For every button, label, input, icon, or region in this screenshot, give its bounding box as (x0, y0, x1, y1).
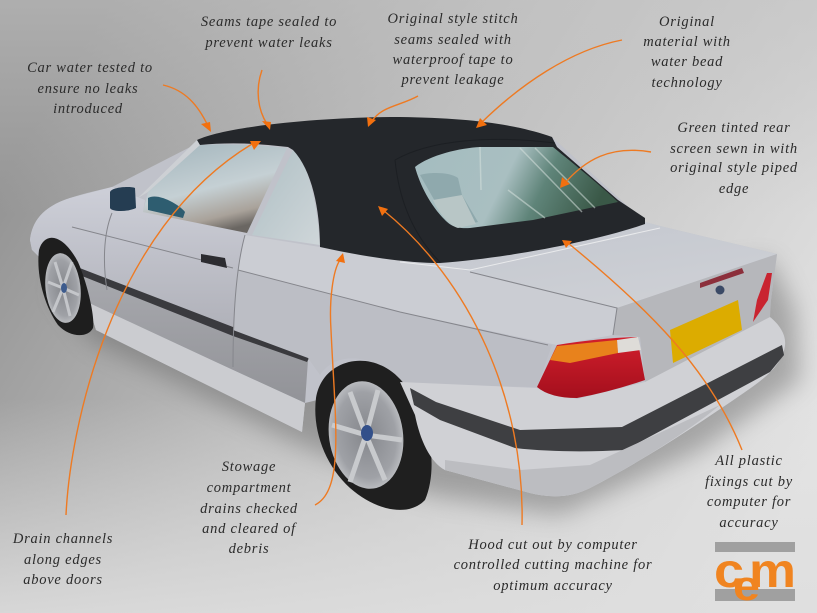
side skirt (87, 302, 305, 432)
label: drain channels: along edges (24, 552, 102, 568)
rear screen (415, 147, 618, 228)
label: stowage: Stowage (222, 459, 276, 475)
label: plastic fixings: All plastic (714, 453, 783, 469)
label: seams tape: prevent water leaks (204, 35, 333, 51)
rub strip (77, 267, 310, 362)
label: stowage: debris (229, 541, 269, 557)
logo: cem: e (733, 562, 760, 609)
label: plastic fixings: computer for (707, 494, 791, 510)
windscreen pillar (138, 140, 203, 198)
label: plastic fixings: accuracy (719, 515, 779, 531)
arrow: drain channels (66, 141, 261, 515)
label: hood cut (454, 537, 652, 594)
number plate (670, 300, 742, 363)
label: water tested: ensure no leaks (38, 81, 138, 97)
label: original material: material with (643, 34, 731, 50)
rear quarter upper (238, 235, 617, 345)
seat highlight (433, 195, 476, 228)
bumper strip (410, 345, 784, 451)
label: green rear screen (670, 120, 798, 197)
logo: cem (714, 542, 796, 609)
right tail light (753, 273, 772, 322)
trunk lid (440, 222, 777, 308)
rear panel (613, 254, 777, 382)
badge (716, 286, 724, 294)
label: stowage (200, 459, 298, 557)
car body silhouette (30, 137, 785, 496)
rear wheel (315, 361, 432, 510)
label: hood cut: controlled cutting machine for (454, 557, 652, 573)
label: hood cut: Hood cut out by computer (467, 537, 638, 553)
rear seat reflection (420, 173, 478, 226)
door lines (72, 213, 617, 367)
label: seams tape (201, 14, 337, 51)
label: original material (643, 14, 731, 91)
rear quarter lower (233, 270, 552, 387)
mirror reflection (148, 196, 185, 218)
label: plastic fixings (705, 453, 793, 531)
window reflection streaks (480, 147, 595, 218)
label: drain channels: above doors (23, 572, 103, 588)
bumper (400, 317, 785, 496)
label: water tested (27, 60, 153, 117)
label: green rear screen: original style piped (670, 160, 798, 176)
lower door (78, 270, 308, 403)
label: original material: technology (651, 75, 723, 91)
label: plastic fixings: fixings cut by (705, 474, 793, 490)
label: stitch: prevent leakage (401, 72, 504, 88)
arrow: plastic fixings (562, 240, 742, 450)
label: water tested: introduced (53, 101, 123, 117)
hood seam highlight (395, 139, 555, 262)
label: original material: Original (659, 14, 715, 30)
label: green rear screen: Green tinted rear (677, 120, 791, 136)
car shadow (55, 230, 800, 515)
label: stitch: waterproof tape to (393, 52, 513, 68)
arrow: original material (476, 40, 622, 128)
arrow: water tested (163, 85, 211, 132)
car illustration (30, 117, 785, 510)
front door window (143, 144, 287, 233)
logo: cem: c (714, 545, 744, 598)
arrow: seams tape (258, 70, 271, 130)
door mirror (110, 187, 136, 211)
bumper lower shade (445, 405, 720, 496)
label: stitch: Original style stitch (388, 11, 518, 27)
label: drain channels (12, 531, 113, 588)
rear quarter window (252, 150, 320, 245)
high brake light (700, 268, 744, 288)
label: original material: water bead (651, 54, 723, 70)
logo: cem: m (749, 545, 796, 598)
arrow: rear screen (560, 150, 651, 188)
label: water tested: Car water tested to (27, 60, 153, 76)
label: stowage: and cleared of (202, 521, 297, 537)
label: hood cut: optimum accuracy (493, 578, 613, 594)
hood (197, 117, 645, 263)
label: stitch: seams sealed with (394, 32, 512, 48)
label: green rear screen: screen sewn in with (670, 141, 798, 157)
label: stowage: drains checked (200, 501, 298, 517)
door and wing panel (30, 187, 247, 330)
left tail light (537, 337, 645, 398)
door handle (201, 254, 227, 268)
label: drain channels: Drain channels (12, 531, 113, 547)
rear fixing strip (400, 228, 660, 270)
arrow: hood cut (378, 206, 522, 525)
label: stowage: compartment (207, 480, 292, 496)
label: green rear screen: edge (719, 181, 749, 197)
label: seams tape: Seams tape sealed to (201, 14, 337, 30)
label: stitch (388, 11, 518, 88)
front wheel (38, 238, 93, 335)
arrow: stitch (367, 96, 418, 127)
arrow: stowage drains (315, 253, 345, 505)
